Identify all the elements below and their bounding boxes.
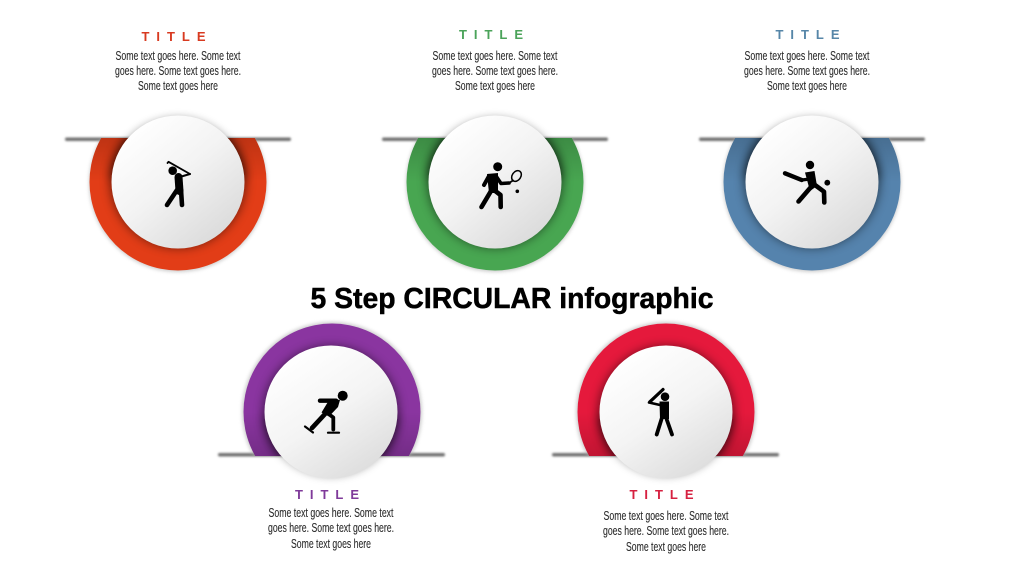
inner shadow xyxy=(598,346,734,482)
shelf line xyxy=(218,453,445,456)
inner shadow xyxy=(110,112,246,248)
upper shadow xyxy=(429,120,561,178)
upper shadow xyxy=(746,120,878,178)
title: TITLE xyxy=(459,27,523,42)
shelf line xyxy=(552,453,779,456)
text block: goes here. Some text goes here. xyxy=(432,64,558,78)
shelf line xyxy=(65,138,291,141)
icon: speed skater xyxy=(305,391,348,433)
shelf line xyxy=(699,138,925,141)
icon: cricket batter xyxy=(785,161,830,202)
panel: step 4 purple xyxy=(218,322,445,551)
text block: goes here. Some text goes here. xyxy=(744,64,870,78)
shelf line xyxy=(382,138,608,141)
text block xyxy=(432,49,558,93)
ring xyxy=(88,138,268,274)
text block: Some text goes here. Some text xyxy=(744,49,870,63)
text block: Some text goes here xyxy=(626,540,706,554)
panel: step 1 red xyxy=(65,29,291,272)
icon: tennis player xyxy=(482,162,523,207)
panel: step 3 blue xyxy=(699,27,925,272)
disc xyxy=(746,116,878,248)
icon: golfer xyxy=(167,162,190,205)
text block: Some text goes here. Some text xyxy=(268,506,394,520)
text block: Some text goes here. Some text xyxy=(116,49,241,63)
disc xyxy=(264,346,398,478)
text block xyxy=(744,49,870,93)
title: TITLE xyxy=(776,27,840,42)
text block: Some text goes here xyxy=(291,537,371,551)
text block xyxy=(268,506,394,551)
text block: Some text goes here. Some text xyxy=(604,509,729,523)
panel: step 5 crimson xyxy=(552,322,779,554)
text block: goes here. Some text goes here. xyxy=(115,64,241,78)
disc xyxy=(428,116,562,248)
text block: Some text goes here xyxy=(138,79,218,93)
title: TITLE xyxy=(295,487,359,502)
text block: Some text goes here xyxy=(455,79,535,93)
disc xyxy=(112,116,244,248)
text block: goes here. Some text goes here. xyxy=(268,521,394,535)
ring xyxy=(574,320,758,456)
disc xyxy=(600,346,732,478)
title: TITLE xyxy=(142,29,206,44)
ring xyxy=(240,320,424,456)
ring xyxy=(722,138,902,274)
upper shadow xyxy=(112,120,244,178)
title: TITLE xyxy=(630,487,694,502)
heading: 5 Step CIRCULAR infographic xyxy=(310,283,714,315)
icon: baseball batter xyxy=(649,390,672,434)
text block: goes here. Some text goes here. xyxy=(603,524,729,538)
panel: step 2 green xyxy=(382,27,608,272)
lower shadow xyxy=(600,416,732,474)
inner shadow xyxy=(744,112,880,248)
inner shadow xyxy=(263,346,399,482)
lower shadow xyxy=(265,416,397,474)
text block: Some text goes here. Some text xyxy=(432,49,558,63)
text block xyxy=(115,49,241,93)
text block xyxy=(603,509,729,554)
text block: Some text goes here xyxy=(767,79,847,93)
inner shadow xyxy=(427,112,563,248)
ring xyxy=(404,138,586,274)
